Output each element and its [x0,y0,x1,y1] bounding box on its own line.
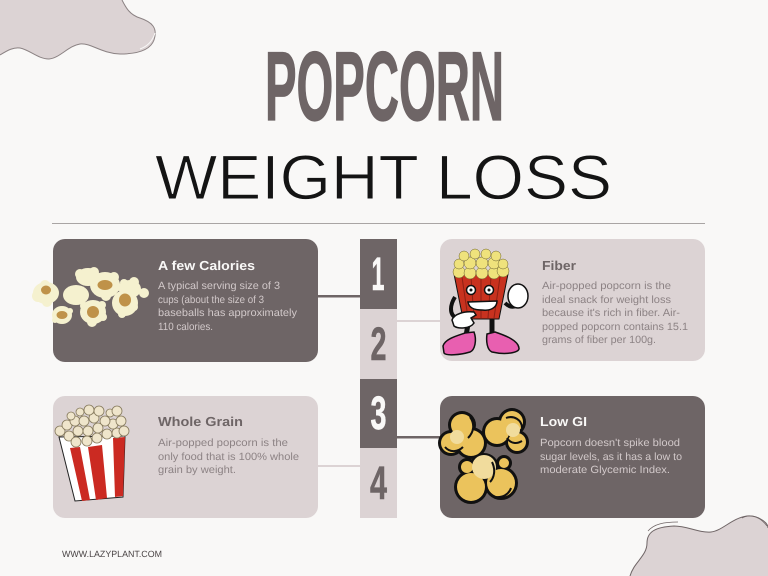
body text: A typical serving size of 3 [158,280,280,292]
gloves [508,284,528,308]
body text [158,437,299,476]
panel: Low GI [438,396,705,518]
body text [158,280,298,333]
body text: Air-popped popcorn is the [158,437,288,449]
icon: golden popcorn [438,408,529,504]
text: POPCORN [265,31,504,141]
panel: A few Calories [32,239,318,362]
face [466,286,476,294]
icon: popcorn mascot [443,249,528,355]
outlines [438,408,529,504]
body text: baseballs has approximately [158,307,298,319]
panel: Whole Grain [53,396,318,518]
number column [360,239,397,518]
fills [441,411,526,501]
number 1 [360,239,397,309]
popcorn top [453,249,509,279]
body text: because it's rich in fiber. Air- [542,307,681,319]
divider line [52,223,705,224]
highlights [472,455,496,479]
number 1: 1 [372,247,384,300]
body text [542,280,688,346]
body text: ideal snack for weight loss [542,294,671,306]
inner strokes [445,417,522,497]
bucket [454,274,508,319]
blob: bottom-right decoration [630,516,768,576]
body text: grain by weight. [158,464,236,476]
body text: moderate Glycemic Index. [540,464,670,476]
body text [540,437,682,476]
arms [451,297,519,318]
number 4 [360,448,397,518]
body text: sugar levels, as it has a low to [540,451,682,463]
heading: Low GI [540,414,587,429]
heading: Whole Grain [158,414,243,429]
shoes [443,332,475,355]
heading: Fiber [542,258,576,273]
number 4: 4 [370,456,387,509]
body text: cups (about the size of 3 [158,294,264,306]
number 2: 2 [370,317,386,370]
blob: top-left decoration [0,0,155,59]
body text: Air-popped popcorn is the [542,280,671,292]
body text: Popcorn doesn't spike blood [540,437,680,449]
footer: website: WWW.LAZYPLANT.COM [62,549,162,559]
connector lines [318,295,440,467]
panel: Fiber [440,239,705,361]
number 3: 3 [370,386,386,439]
body text: only food that is 100% whole [158,451,299,463]
number 3 [360,379,397,448]
body text: grams of fiber per 100g. [542,334,656,346]
icon: popcorn kernels [32,267,149,327]
number 2 [360,309,397,379]
legs [466,318,492,336]
body text: popped popcorn contains 15.1 [542,321,688,333]
body text: 110 calories. [158,321,213,333]
icon: striped popcorn bucket [55,405,129,501]
subtitle: WEIGHT LOSS: WEIGHT LOSS [155,143,612,213]
heading: A few Calories [158,258,255,273]
